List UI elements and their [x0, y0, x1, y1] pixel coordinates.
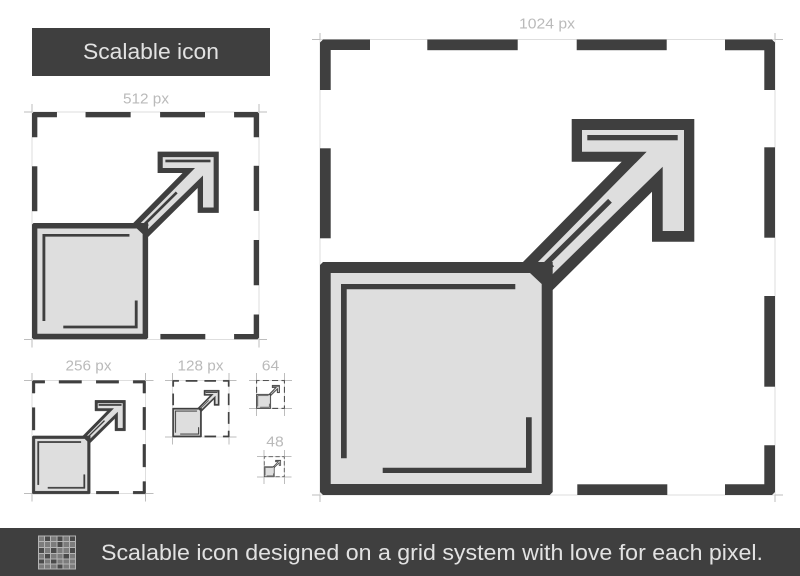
- icon: 128 px scalable icon: [172, 380, 229, 437]
- square: [320, 262, 553, 495]
- guide frame: 48 px: [257, 450, 292, 484]
- size label: 1024 px: 1024 px: [519, 16, 576, 32]
- icon: pixel grid: [38, 536, 76, 570]
- size label: 512 px: 512 px: [123, 92, 170, 108]
- guide frame: 512 px: [24, 104, 267, 348]
- guide frame: 64 px: [249, 373, 292, 416]
- title banner: [32, 28, 270, 76]
- footer text: Scalable icon designed on a grid system with love for each pixel.: [101, 540, 763, 565]
- footer bar: [0, 528, 800, 576]
- size label: 48: 48: [266, 434, 284, 450]
- icon: 256 px scalable icon: [32, 380, 146, 494]
- icon: 1024 px scalable icon: [320, 40, 775, 495]
- size label: 256 px: 256 px: [66, 358, 112, 374]
- icon: 48 px scalable icon: [264, 456, 284, 477]
- guide frame: 256 px: [24, 373, 154, 502]
- guide frame: 128 px: [165, 373, 236, 444]
- size label: 64: 64: [262, 358, 279, 374]
- diagonal arrow: [523, 119, 694, 290]
- dashed outer border: [320, 40, 775, 495]
- title banner: Scalable icon: [83, 39, 219, 64]
- guide frame: 1024 px: [312, 33, 783, 502]
- icon: 64 px scalable icon: [256, 380, 285, 409]
- size label: 128 px: 128 px: [178, 358, 224, 374]
- icon: 512 px scalable icon: [32, 112, 259, 339]
